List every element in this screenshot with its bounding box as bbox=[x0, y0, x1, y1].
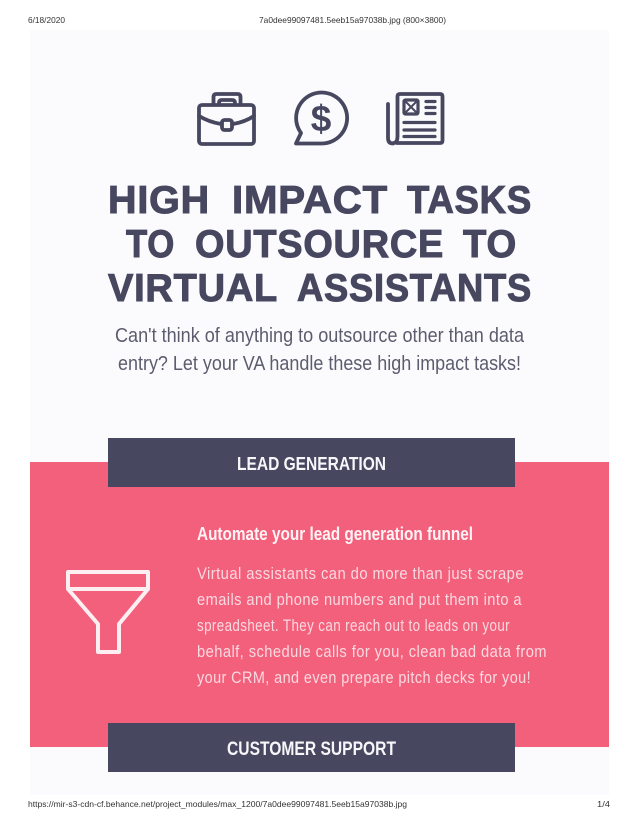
print header: 7a0dee99097481.5eeb15a97038b.jpg (800×3800) bbox=[259, 15, 446, 25]
heading bar: lead generation: LEAD GENERATION bbox=[237, 454, 386, 474]
title bbox=[108, 179, 532, 310]
title: HIGH bbox=[108, 179, 210, 222]
panel: lead generation bbox=[30, 462, 609, 747]
heading bar: customer support bbox=[108, 723, 515, 772]
body text: behalf, schedule calls for you, clean bad data from bbox=[197, 642, 547, 661]
title: ASSISTANTS bbox=[297, 267, 532, 310]
icon: funnel bbox=[68, 572, 148, 652]
print footer: https://mir-s3-cdn-cf.behance.net/project_modules/max_1200/7a0dee99097481.5eeb15a97038b.jpg bbox=[28, 799, 407, 809]
title: TO bbox=[463, 223, 517, 266]
body text: your CRM, and even prepare pitch decks for you! bbox=[197, 668, 531, 687]
body text: spreadsheet. They can reach out to leads on your bbox=[197, 616, 510, 635]
heading bar: lead generation bbox=[108, 438, 515, 487]
print header: 6/18/2020 bbox=[28, 15, 65, 25]
print header bbox=[28, 15, 446, 25]
title: IMPACT bbox=[232, 179, 388, 222]
icon: dollar speech bubble: $ bbox=[311, 98, 332, 139]
title: VIRTUAL bbox=[108, 267, 278, 310]
subtitle: entry? Let your VA handle these high impact tasks! bbox=[118, 352, 521, 375]
print footer bbox=[28, 799, 610, 809]
title: OUTSOURCE bbox=[195, 223, 444, 266]
icon: newspaper bbox=[388, 94, 442, 144]
body text bbox=[197, 564, 547, 687]
icon: briefcase bbox=[199, 94, 254, 144]
heading bar: customer support: CUSTOMER SUPPORT bbox=[227, 739, 396, 760]
subheading: Automate your lead generation funnel bbox=[197, 524, 473, 544]
print footer: 1/4 bbox=[597, 799, 610, 809]
subtitle: Can't think of anything to outsource other than data bbox=[115, 324, 525, 347]
title: TO bbox=[126, 223, 175, 266]
title: TASKS bbox=[407, 179, 532, 222]
body text: Virtual assistants can do more than just scrape bbox=[197, 564, 524, 583]
body text: emails and phone numbers and put them into a bbox=[197, 590, 522, 609]
subtitle bbox=[115, 324, 525, 375]
icon: dollar speech bubble bbox=[296, 93, 347, 144]
